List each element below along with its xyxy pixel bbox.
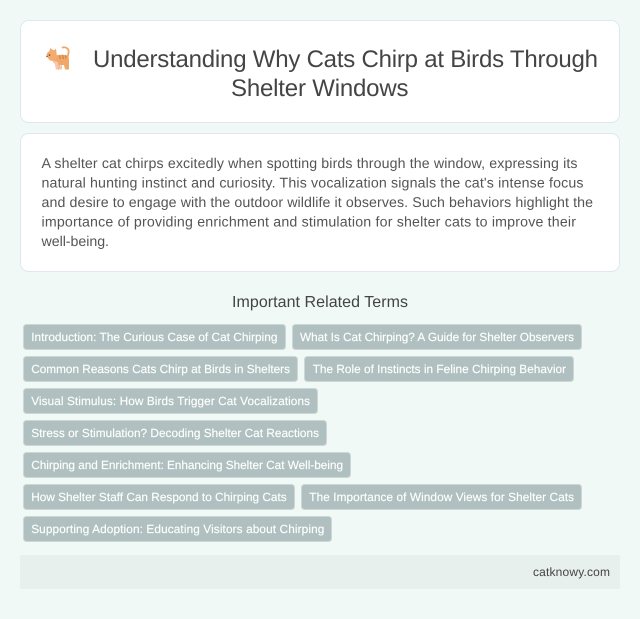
footer: catknowy.com [533, 565, 610, 579]
footer [20, 555, 620, 589]
description paragraph: importance of providing enrichment and stimulation for shelter cats to improve their [42, 214, 576, 230]
tag: Visual Stimulus: How Birds Trigger Cat Vocalizations [31, 394, 310, 408]
tag: How Shelter Staff Can Respond to Chirping Cats [31, 490, 287, 504]
tag [24, 356, 298, 382]
description paragraph [40, 156, 593, 250]
tag: What Is Cat Chirping? A Guide for Shelter Observers [300, 330, 574, 344]
tag [24, 484, 294, 510]
tag [24, 452, 350, 478]
panel: title card [20, 20, 620, 122]
heading: related terms: Important Related Terms [232, 294, 408, 311]
title text: Shelter Windows [231, 75, 408, 102]
tag [24, 420, 326, 446]
tag [24, 324, 286, 350]
tag [24, 388, 318, 414]
tag list [24, 324, 582, 542]
tag: The Importance of Window Views for Shelter Cats [309, 490, 574, 504]
tag: Stress or Stimulation? Decoding Shelter Cat Reactions [31, 426, 319, 440]
tag [24, 516, 332, 542]
tag: The Role of Instincts in Feline Chirping Behavior [313, 362, 566, 376]
description paragraph: well-being. [40, 234, 109, 250]
tag: Chirping and Enrichment: Enhancing Shelter Cat Well-being [31, 458, 343, 472]
tag: Supporting Adoption: Educating Visitors about Chirping [31, 522, 324, 536]
description paragraph: and desire to engage with the outdoor wildlife it observes. Such behaviors highlight the [42, 195, 593, 211]
tag [302, 484, 582, 510]
panel: description [20, 134, 620, 272]
title text: Understanding Why Cats Chirp at Birds Through [93, 46, 598, 73]
tag: Introduction: The Curious Case of Cat Chirping [31, 330, 277, 344]
tag [292, 324, 582, 350]
description paragraph: natural hunting instinct and curiosity. This vocalization signals the cat's intense focus [42, 175, 584, 191]
tag: Common Reasons Cats Chirp at Birds in Shelters [31, 362, 290, 376]
title text [93, 46, 598, 102]
icon: orange cat [46, 47, 69, 70]
description paragraph: A shelter cat chirps excitedly when spotting birds through the window, expressing its [42, 156, 578, 172]
tag [304, 356, 574, 382]
